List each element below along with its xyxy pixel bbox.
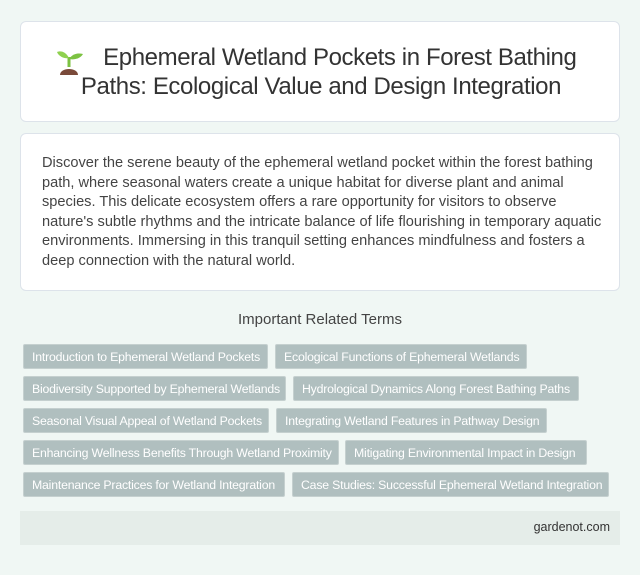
tag — [275, 344, 527, 369]
tag: Ecological Functions of Ephemeral Wetlands — [284, 350, 519, 364]
description card — [20, 133, 620, 291]
icon: sprout — [57, 51, 83, 75]
title: Paths: Ecological Value and Design Integration — [81, 73, 561, 100]
tag — [23, 408, 269, 433]
tag — [23, 440, 339, 465]
tag: Biodiversity Supported by Ephemeral Wetlands — [32, 382, 280, 396]
heading: related terms: Important Related Terms — [238, 311, 402, 328]
tag: Mitigating Environmental Impact in Design — [354, 446, 575, 460]
title card — [20, 21, 620, 122]
title: Ephemeral Wetland Pockets in Forest Bathing — [103, 44, 576, 71]
tag: Maintenance Practices for Wetland Integration — [32, 478, 275, 492]
tag — [23, 344, 268, 369]
tag: Case Studies: Successful Ephemeral Wetland Integration — [301, 478, 602, 492]
description text: Discover the serene beauty of the ephemeral wetland pocket within the forest bathing path, where seasonal waters create a unique habitat for diverse plant and animal species. This delicate ecosystem offers a rare opportunity for visitors to observe nature's subtle rhythms and the intricate balance of life flourishing in temporary aquatic environments. Immersing in this tranquil setting enhances mindfulness and fosters a deep connection with the natural world. — [42, 155, 601, 268]
tag — [345, 440, 587, 465]
title — [81, 44, 576, 100]
tag: Seasonal Visual Appeal of Wetland Pockets — [32, 414, 262, 428]
tag — [292, 472, 609, 497]
tag: Integrating Wetland Features in Pathway Design — [285, 414, 539, 428]
footer — [20, 511, 620, 545]
tag: Hydrological Dynamics Along Forest Bathing Paths — [302, 382, 570, 396]
footer text: gardenot.com — [534, 520, 610, 534]
tag: Introduction to Ephemeral Wetland Pockets — [32, 350, 260, 364]
tag — [23, 472, 285, 497]
tag — [293, 376, 579, 401]
tag — [23, 376, 286, 401]
tag: Enhancing Wellness Benefits Through Wetland Proximity — [32, 446, 332, 460]
tag — [276, 408, 547, 433]
